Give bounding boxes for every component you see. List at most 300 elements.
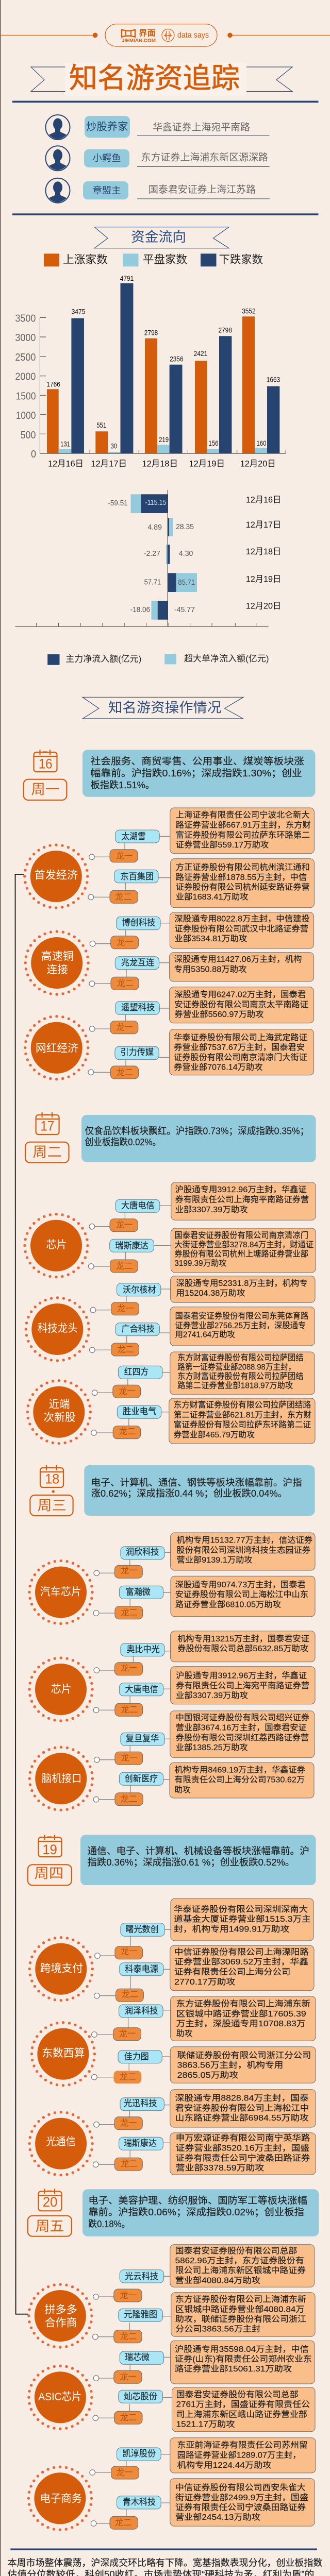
stock chain: 凯淳股份: 机构专用1224.44万助攻 xyxy=(177,2461,272,2470)
stock chain: 瑞斯康达 (Thursday): 营业部3378.59万助攻 xyxy=(176,2163,264,2173)
stock chain: 光云科技: 5862.96万主封，东方证券股份有 xyxy=(175,2256,304,2265)
stock chain: 光云科技: 光云科技 xyxy=(125,2272,158,2281)
stock chain: 瑞斯康达: 大街证券营业部3278.84万主封，财通证 xyxy=(174,1240,314,1249)
stock chain: 太湖雪: 龙一 xyxy=(116,851,133,861)
theme: 跨境支付 xyxy=(29,1938,92,2001)
stock chain: 瑞斯康达 xyxy=(88,1228,316,1273)
theme: 高速铜连接 xyxy=(25,931,88,994)
stock chain: 灿芯股份: 1521.17万助攻 xyxy=(176,2419,235,2429)
stock chain: 复旦复华: 复旦复华 xyxy=(126,1734,159,1743)
legend: market breadth xyxy=(44,253,263,266)
stock chain: 复旦复华: 业部1385.25万助攻 xyxy=(176,1743,248,1752)
stock chain: 润泽科技: 润泽科技 xyxy=(125,2006,158,2015)
stock chain: 太湖雪 xyxy=(89,808,314,862)
bar chart: market breadth: 3500 xyxy=(15,313,36,324)
day panel: Wednesday 18: 涨0.62%；深成指涨0.44 %；创业板跌0.04%。 xyxy=(91,1488,287,1499)
stock chain: 广合科技: 龙二 xyxy=(117,1345,134,1354)
stock chain: 凯淳股份 xyxy=(90,2438,316,2479)
stock chain: 大唐电信 (Wednesday): 券有限责任公司上海宛平南路证券营 xyxy=(176,1681,309,1690)
theme: 汽车芯片: 汽车芯片 xyxy=(40,1586,81,1598)
stock chain: 瑞斯康达 (Thursday): 瑞斯康达 xyxy=(124,2138,157,2148)
stock chain: 遥望科技: 遥望科技 xyxy=(121,1003,155,1012)
stock chain: 曙光数创 xyxy=(95,1899,314,1959)
stock chain: 曙光数创: 曙光数创 xyxy=(125,1925,159,1934)
theme: 科技龙头 xyxy=(26,1298,89,1361)
stock chain: 富瀚微: 安证券股份有限公司上海松江中山东 xyxy=(175,1590,308,1599)
header logo strip: JIEMIAN.COM xyxy=(122,39,156,43)
theme: 芯片: 芯片 xyxy=(46,1239,67,1251)
stock chain: 富瀚微: 龙二 xyxy=(121,1607,138,1618)
stock chain: 大唐电信: 沪股通专用3912.96万主封，华鑫证 xyxy=(175,1184,307,1194)
stock chain: 科泰电源: 2770.17万助攻 xyxy=(174,1977,235,1987)
stock chain: 遥望科技: 安证券股份有限公司南京太平南路证 xyxy=(174,1000,308,1009)
stock chain: 广合科技 xyxy=(90,1307,315,1356)
stock chain: 凯淳股份: 东亚前海证券有限责任公司苏州留 xyxy=(177,2441,308,2450)
stock chain: 太湖雪: 上海证券有限责任公司宁波北仑新大 xyxy=(176,810,310,820)
bar chart: market breadth: 12月19日 xyxy=(189,459,225,469)
bar chart: market breadth: 1663 xyxy=(267,376,280,384)
theme: 东数西算: 东数西算 xyxy=(42,2047,85,2059)
stock chain: 光迅科技 xyxy=(94,2090,316,2130)
legend: capital net inflow: 超大单净流入额(亿元) xyxy=(184,654,269,664)
stock chain: 奥比中光: 机构专用13215万主封，国泰君安证 xyxy=(177,1634,309,1643)
stock chain: 润泽科技: 区银城中路证券营业部17605.39 xyxy=(176,2009,306,2019)
stock chain: 胜业电气: 东方财富证券股份有限公司拉萨团结路 xyxy=(174,1400,311,1410)
stock chain: 太湖雪: 富证券股份有限公司拉萨东环路第二 xyxy=(176,831,310,840)
person: 小鳄鱼: 东方证券上海浦东新区源深路 xyxy=(141,151,268,163)
stock chain: 曙光数创: 龙一 xyxy=(121,1946,138,1956)
section heading: 知名游资操作情况 xyxy=(82,697,243,719)
stock chain: 创新医疗: 机构专用8469.19万主封，华鑫证券 xyxy=(174,1765,305,1774)
bar chart: capital net inflow: -59.51 xyxy=(108,499,128,507)
header logo strip: 界面 xyxy=(139,29,156,38)
theme: 高速铜连接: 高速铜 xyxy=(41,951,74,962)
theme: 高速铜连接: 连接 xyxy=(47,964,68,976)
stock chain: 红四方: 龙一 xyxy=(119,1386,136,1396)
day panel: Monday 16: 16 xyxy=(39,756,53,771)
theme: ASIC芯片: ASIC芯片 xyxy=(38,2391,81,2403)
stock chain: 复旦复华: 龙一 xyxy=(121,1753,138,1763)
bar chart: capital net inflow: 12月17日 xyxy=(246,520,281,530)
stock chain: 凯淳股份: 凯淳股份 xyxy=(123,2449,156,2459)
stock chain: 科泰电源: 证券有限责任公司上海分公司 xyxy=(174,1967,290,1976)
stock chain: 大唐电信 xyxy=(89,1182,316,1232)
stock chain: 富瀚微: 深股通专用9074.73万主封，国泰君 xyxy=(175,1580,306,1589)
day panel: Friday 20: 跌0.18%。 xyxy=(88,2218,130,2229)
stock chain: 大唐电信 (Wednesday): 沪股通专用3912.96万主封，华鑫证 xyxy=(176,1670,307,1681)
stock chain: 青木科技: 街证券营业部2499.9万主封，国盛 xyxy=(175,2493,308,2502)
bar chart: capital net inflow: -45.77 xyxy=(174,605,195,614)
stock chain: 胜业电气: 第二证券营业部621.81万主封，东方财 xyxy=(174,1411,311,1420)
bar chart: market breadth: 2500 xyxy=(15,352,36,363)
stock chain: 瑞斯康达 (Thursday) xyxy=(93,2133,316,2175)
day panel: Monday 16 xyxy=(24,750,315,800)
stock chain: 富瀚微 xyxy=(93,1576,315,1619)
stock chain: 遥望科技 xyxy=(90,987,314,1034)
day panel: Friday 20: 20 xyxy=(43,2194,58,2210)
stock chain: 大唐电信: 大唐电信 xyxy=(121,1200,155,1211)
stock chain: 瑞斯康达: 瑞斯康达 xyxy=(115,1241,148,1251)
stock chain: 博创科技 xyxy=(90,912,314,949)
bar chart: market breadth: 30 xyxy=(110,442,117,450)
person: 章盟主 xyxy=(45,178,270,203)
stock chain: 瑞芯微: 龙一 xyxy=(120,2372,137,2382)
section heading: 知名游资操作情况: 知名游资操作情况 xyxy=(108,700,221,715)
bar chart: market breadth: 1500 xyxy=(16,391,36,402)
person: 炒股养家 xyxy=(45,115,269,140)
stock chain: 广合科技: 用2741.64万助攻 xyxy=(175,1330,235,1340)
bar chart: market breadth: 2798 xyxy=(144,328,158,336)
theme: ASIC芯片 xyxy=(29,2366,92,2429)
day panel: Friday 20: 靠前。沪指跌0.06%；深成指跌0.02%；创业板指 xyxy=(88,2207,304,2217)
stock chain: 东百集团: 龙二 xyxy=(115,892,132,902)
bar chart: capital net inflow: 57.71 xyxy=(144,578,161,586)
theme: 光通信 xyxy=(29,2112,92,2175)
stock chain: 青木科技: 中信证券股份有限公司西安朱雀大 xyxy=(175,2483,306,2493)
stock chain: 青木科技: 证券有限责任公司宁波桑田路证券 xyxy=(175,2503,306,2512)
stock chain: 红四方: 东方财富证券股份有限公司拉萨团结 xyxy=(177,1371,304,1381)
header logo strip: data says xyxy=(177,31,209,40)
section heading: 资金流向: 资金流向 xyxy=(131,229,186,245)
stock chain: 瑞斯康达: 3199.39万助攻 xyxy=(174,1259,227,1268)
stock chain: 红四方: 路第二证券营业部1818.97万助攻 xyxy=(177,1381,293,1390)
stock chain: 大唐电信: 龙一 xyxy=(116,1220,133,1230)
stock chain: 佳力图: 佳力图 xyxy=(124,2052,149,2062)
stock chain: 胜业电气: 胜业电气 xyxy=(123,1406,156,1416)
stock chain: 广合科技: 广合科技 xyxy=(122,1324,155,1334)
day panel: Monday 16: 幅靠前。沪指跌0.16%；深成指跌1.30%；创业 xyxy=(91,768,302,778)
day panel: Friday 20: 周五 xyxy=(36,2219,64,2234)
day panel: Tuesday 17: 仅食品饮料板块飘红。沪指跌0.73%；深成指跌0.35%； xyxy=(85,1125,309,1137)
stock chain: 曙光数创: 华泰证券股份有限公司深圳深南大 xyxy=(174,1905,308,1914)
bar chart: capital net inflow: 4.30 xyxy=(179,549,193,558)
legend: capital net inflow: 主力净流入额(亿元) xyxy=(65,654,141,664)
theme: 近端次新股: 近端 xyxy=(49,1398,70,1411)
stock chain: 兆龙互连: 龙二 xyxy=(117,978,134,988)
theme: 首发经济 xyxy=(25,845,88,908)
stock chain: 曙光数创: 道基金大厦证券营业部1515.3万主 xyxy=(174,1914,311,1924)
bar chart: market breadth: 131 xyxy=(60,439,70,448)
day panel: Friday 20: 电子、美容护理、纺织服饰、国防军工等板块涨幅 xyxy=(88,2195,307,2206)
bar chart: capital net inflow: 4.89 xyxy=(147,523,162,532)
day panel: Monday 16: 板指跌1.51%。 xyxy=(91,779,155,790)
day panel: Wednesday 18: 周三 xyxy=(38,1498,67,1514)
bar chart: capital net inflow: -2.27 xyxy=(144,549,160,558)
stock chain: 引力传媒: 华泰证券股份有限公司上海武定路证 xyxy=(174,1033,307,1042)
stock chain: 瑞斯康达 (Thursday): 申万宏源证券有限公司南宁英华路 xyxy=(176,2133,310,2143)
stock chain: 科泰电源: 龙二 xyxy=(122,1990,138,1999)
stock chain: 大唐电信 (Wednesday): 龙二 xyxy=(121,1705,138,1715)
stock chain: 佳力图: 3863.56万主封，机构专用 xyxy=(177,2061,283,2070)
stock chain: 遥望科技: 券营业部5560.97万助攻 xyxy=(174,1010,263,1019)
stock chain: 灿芯股份: 2761万主封，国盛证券有限责任公 xyxy=(176,2400,310,2409)
stock chain: 广合科技: 国泰君安证券股份有限公司东莞体育路 xyxy=(175,1312,308,1321)
stock chain: 科泰电源 xyxy=(94,1945,314,2002)
stock chain: 引力传媒: 券营业部7076.14万助攻 xyxy=(174,1062,262,1072)
stock chain: 大唐电信 (Wednesday) xyxy=(93,1667,315,1716)
bar chart: market breadth: 0 xyxy=(31,449,36,460)
day panel: Thursday 19: 周四 xyxy=(34,1866,63,1882)
stock chain: 红四方: 红四方 xyxy=(124,1367,148,1377)
bar chart: market breadth: 3475 xyxy=(72,307,85,315)
stock chain: 光云科技: 龙一 xyxy=(120,2291,137,2300)
stock chain: 创新医疗: 龙二 xyxy=(121,1794,137,1804)
person: 炒股养家: 炒股养家 xyxy=(86,121,128,133)
stock chain: 科泰电源: 科泰电源 xyxy=(125,1964,158,1974)
stock chain: 瑞斯康达: 国泰君安证券股份有限公司南京清凉门 xyxy=(174,1231,308,1240)
bar chart: market breadth: 219 xyxy=(159,435,169,444)
stock chain: 润泽科技: 东方证券股份有限公司上海浦东新 xyxy=(176,1999,310,2008)
stock chain: 创新医疗: 助攻 xyxy=(174,1785,190,1794)
stock chain: 青木科技 xyxy=(91,2479,315,2529)
stock chain: 东百集团: 证券股份有限公司杭州延安路证券营 xyxy=(176,883,310,892)
stock chain: 大唐电信 (Wednesday): 大唐电信 xyxy=(125,1684,158,1694)
day panel: Thursday 19 xyxy=(28,1835,316,1885)
rule above summary xyxy=(10,2548,317,2550)
bar chart: market breadth: 12月20日 xyxy=(240,459,276,469)
stock chain: 引力传媒 xyxy=(88,1029,314,1079)
theme: 拼多多合作商 xyxy=(29,2284,92,2347)
person: 章盟主: 章盟主 xyxy=(93,185,121,196)
bar chart: capital net inflow: 85.71 xyxy=(178,578,195,587)
stock chain: 东百集团: 路证券营业部1878.55万主封，中信 xyxy=(176,873,307,882)
person: 小鳄鱼: 小鳄鱼 xyxy=(93,152,121,163)
theme: 脑机接口 xyxy=(29,1747,92,1810)
stock chain: 光云科技: 营业部4080.84万助攻 xyxy=(175,2276,260,2285)
bar chart: market breadth: 12月18日 xyxy=(142,459,178,469)
bar chart: market breadth: 12月17日 xyxy=(91,459,127,469)
stock chain: 富瀚微: 路证券营业部6810.05万助攻 xyxy=(175,1600,281,1609)
timeline line xyxy=(15,874,28,2314)
stock chain: 大唐电信 (Wednesday): 业部3307.39万助攻 xyxy=(176,1691,248,1700)
stock chain: 奥比中光 xyxy=(94,1631,315,1675)
bar chart: capital net inflow: 28.35 xyxy=(176,522,194,531)
summary paragraph xyxy=(8,2557,322,2576)
stock chain: 瑞斯康达: 券股份有限公司杭州上塘路证券营业部 xyxy=(174,1249,308,1259)
stock chain: 沃尔核材 xyxy=(90,1276,315,1315)
stock chain: 灿芯股份: 灿芯股份 xyxy=(124,2392,157,2401)
stock chain: 润欣科技: 营业部9139.1万助攻 xyxy=(176,1555,253,1565)
stock chain: 胜业电气: 龙二 xyxy=(119,1427,136,1436)
stock chain: 创新医疗 xyxy=(93,1762,314,1806)
day panel: Thursday 19: 指跌0.36%；深成指涨0.61 %；创业板跌0.52%。 xyxy=(87,1857,294,1868)
stock chain: 光迅科技: 龙一 xyxy=(120,2119,137,2128)
header logo strip xyxy=(0,24,330,46)
day panel: Monday 16: 社会服务、商贸零售、公用事业、煤炭等板块涨 xyxy=(91,756,304,767)
stock chain: 红四方: 路第一证券营业部2088.98万主封， xyxy=(177,1362,296,1371)
legend: capital net inflow xyxy=(47,654,269,665)
stock chain: 东百集团: 方正证券股份有限公司杭州滨江通和 xyxy=(176,862,310,872)
stock chain: 兆龙互连 xyxy=(89,953,314,990)
stock chain: 东百集团 xyxy=(88,859,314,908)
stock chain: 佳力图: 2865.05万助攻 xyxy=(177,2071,238,2080)
rule top xyxy=(12,101,319,103)
stock chain: 瑞斯康达 (Thursday): 龙二 xyxy=(121,2159,138,2169)
stock chain: 创新医疗: 创新医疗 xyxy=(125,1774,158,1784)
stock chain: 博创科技: 业部3534.81万助攻 xyxy=(174,934,247,943)
person: 章盟主: 国泰君安证券上海江苏路 xyxy=(148,184,256,195)
bar chart: market breadth: 2000 xyxy=(15,371,36,383)
stock chain: 凯淳股份: 园路证券营业部1289.07万主封， xyxy=(177,2450,301,2460)
bar chart: market breadth xyxy=(15,274,286,469)
stock chain: 太湖雪: 证券营业部559.17万助攻 xyxy=(176,840,269,850)
stock chain: 润欣科技: 润欣科技 xyxy=(126,1547,159,1557)
title ribbon: 知名游资追踪 xyxy=(69,62,240,94)
theme: 脑机接口: 脑机接口 xyxy=(42,1773,81,1785)
stock chain: 博创科技: 龙一 xyxy=(117,938,134,947)
stock chain: 瑞斯康达 (Thursday): 证券有限责任公司宁波桑田路证券 xyxy=(176,2154,310,2163)
stock chain: 引力传媒: 券营业部7537.67万主封，国泰君安 xyxy=(174,1043,305,1052)
legend: market breadth: 下跌家数 xyxy=(219,253,263,266)
stock chain: 润泽科技: 万主封，深股通专用10708.83万 xyxy=(176,2019,306,2028)
bar chart: market breadth: 3000 xyxy=(15,332,36,344)
stock chain: 引力传媒: 龙二 xyxy=(117,1067,133,1077)
stock chain: 瑞斯康达 (Thursday): 证券营业部3520.16万主封，国盛 xyxy=(176,2143,309,2153)
stock chain: 光迅科技: 深股通专用8828.84万主封，国泰 xyxy=(175,2094,309,2103)
stock chain: 沃尔核材: 用15204.38万助攻 xyxy=(176,1289,245,1298)
stock chain: 红四方 xyxy=(92,1352,315,1398)
stock chain: 青木科技: 营业部2454.13万助攻 xyxy=(175,2513,260,2522)
bar chart: capital net inflow: 12月18日 xyxy=(246,547,281,556)
stock chain: 复旦复华: 中国银河证券股份有限公司绍兴证券 xyxy=(176,1713,309,1722)
bar chart: market breadth: 551 xyxy=(96,421,106,429)
bar chart: market breadth: 3552 xyxy=(242,307,256,315)
stock chain: 大唐电信: 业部3307.39万助攻 xyxy=(175,1205,248,1214)
summary paragraph: 本周市场整体震荡，沪深成交环比略有下降。宽基指数表现分化，创业板指数 xyxy=(8,2557,322,2568)
stock chain: 润泽科技 xyxy=(92,1996,316,2041)
stock chain: 青木科技: 龙二 xyxy=(114,2518,131,2528)
day panel: Thursday 19: 通信、电子、计算机、机械设备等板块涨幅靠前。沪 xyxy=(87,1845,309,1856)
stock chain: 佳力图: 龙二 xyxy=(120,2072,136,2081)
stock chain: 元隆雅图: 东方证券股份有限公司上海浦东新 xyxy=(175,2295,306,2304)
stock chain: 太湖雪: 路证券营业部667.91万主封，东方财 xyxy=(176,820,311,829)
day panel: Friday 20 xyxy=(28,2189,319,2236)
theme: 芯片 (Wednesday): 芯片 xyxy=(51,1684,72,1695)
stock chain: 元隆雅图: 元隆雅图 xyxy=(124,2310,157,2319)
theme: 网红经济 xyxy=(25,1016,88,1079)
stock chain: 瑞芯微: 路证券营业部15061.31万助攻 xyxy=(175,2364,292,2374)
bar chart: market breadth: 1766 xyxy=(46,380,60,388)
stock chain: 元隆雅图: 区银城中路证券营业部4080.84万 xyxy=(175,2305,305,2314)
theme: 拼多多合作商: 拼多多 xyxy=(44,2304,77,2316)
bar chart: capital net inflow: 12月20日 xyxy=(246,601,281,611)
stock chain: 红四方: 东方财富证券股份有限公司拉萨团结 xyxy=(177,1353,304,1362)
stock chain: 润泽科技: 助攻 xyxy=(176,2029,192,2038)
stock chain: 广合科技: 证券营业部2756.25万主封，深股通专 xyxy=(175,1321,306,1330)
stock chain: 凯淳股份: 龙一 xyxy=(116,2468,133,2477)
day panel: Tuesday 17: 周二 xyxy=(32,1145,62,1160)
day panel: Tuesday 17: 创业板指跌0.02%。 xyxy=(85,1137,161,1147)
stock chain: 博创科技: 证券股份有限公司武汉中北路证券营 xyxy=(174,924,308,934)
stock chain: 润泽科技: 龙一 xyxy=(119,2029,136,2039)
stock chain: 沃尔核材: 沃尔核材 xyxy=(123,1285,156,1295)
day panel: Wednesday 18 xyxy=(30,1465,315,1516)
stock chain: 创新医疗: 有限责任公司上海分公司7530.62万 xyxy=(174,1775,305,1785)
bar chart: capital net inflow xyxy=(15,490,281,626)
bar chart: capital net inflow: 12月16日 xyxy=(246,495,281,505)
stock chain: 佳力图: 联储证券股份有限公司浙江分公司 xyxy=(177,2050,311,2060)
bar chart: capital net inflow: -18.06 xyxy=(130,605,150,614)
stock chain: 灿芯股份: 龙二 xyxy=(120,2413,137,2422)
stock chain: 元隆雅图 xyxy=(93,2293,315,2343)
stock chain: 灿芯股份 xyxy=(93,2387,315,2432)
rule second xyxy=(12,213,319,215)
theme: 近端次新股 xyxy=(27,1381,90,1444)
theme: 科技龙头: 科技龙头 xyxy=(38,1323,78,1334)
stock chain: 兆龙互连: 专用5350.88万助攻 xyxy=(174,964,246,974)
stock chain: 润欣科技: 股份有限公司深圳湾科技生态园证券 xyxy=(176,1546,310,1555)
theme: 跨境支付: 跨境支付 xyxy=(40,1963,83,1974)
stock chain: 元隆雅图: 分公司3863.56万主封 xyxy=(175,2325,260,2334)
stock chain: 沃尔核材: 龙一 xyxy=(117,1303,134,1314)
stock chain: 兆龙互连: 兆龙互连 xyxy=(121,958,154,968)
person: 小鳄鱼 xyxy=(45,146,269,171)
bar chart: market breadth: 12月16日 xyxy=(48,459,84,469)
stock chain: 沃尔核材: 深股通专用52331.8万主封，机构专 xyxy=(176,1279,308,1288)
bar chart: market breadth: 2421 xyxy=(194,349,207,358)
section heading: 资金流向 xyxy=(94,227,229,248)
stock chain: 富瀚微: 富瀚微 xyxy=(126,1587,151,1597)
stock chain: 科泰电源: 中信证券股份有限公司上海溧阳路 xyxy=(174,1947,309,1957)
stock chain: 科泰电源: 证券营业部3069.52万主封，华鑫 xyxy=(174,1957,308,1967)
theme: 首发经济: 首发经济 xyxy=(34,870,78,881)
stock chain: 光云科技: 国泰君安证券股份有限公司总部 xyxy=(175,2246,297,2256)
bar chart: capital net inflow: 12月19日 xyxy=(246,574,281,584)
day panel: Monday 16: 周一 xyxy=(31,782,59,798)
stock chain: 复旦复华: 券股份有限公司深圳红荔西路证券营 xyxy=(176,1733,309,1742)
bar chart: market breadth: 2356 xyxy=(170,354,184,363)
stock chain: 青木科技: 青木科技 xyxy=(123,2497,156,2507)
stock chain: 元隆雅图: 龙二 xyxy=(120,2332,137,2341)
stock chain: 光云科技: 限公司上海浦东新区银城中路证券 xyxy=(175,2266,306,2275)
title ribbon xyxy=(31,62,292,96)
bar chart: market breadth: 2798 xyxy=(218,326,232,334)
stock chain: 胜业电气: 富证券股份有限公司拉萨东环路第二证 xyxy=(174,1420,311,1429)
day panel: Wednesday 18: 电子、计算机、通信、钢铁等板块涨幅靠前。沪指 xyxy=(91,1477,302,1488)
stock chain: 遥望科技: 龙一 xyxy=(116,1022,133,1032)
stock chain: 胜业电气 xyxy=(91,1398,315,1444)
stock chain: 太湖雪: 太湖雪 xyxy=(122,832,146,841)
bar chart: market breadth: 1000 xyxy=(16,410,36,421)
bar chart: capital net inflow: -115.15 xyxy=(145,498,166,507)
stock chain: 复旦复华 xyxy=(94,1711,315,1765)
day panel: Tuesday 17: 17 xyxy=(40,1118,54,1134)
stock chain: 光迅科技: 山东路证券营业部6984.55万助攻 xyxy=(175,2113,309,2123)
stock chain: 大唐电信: 券有限责任公司上海宛平南路证券营 xyxy=(175,1195,309,1205)
bar chart: market breadth: 160 xyxy=(257,439,267,447)
day panel: Wednesday 18: 18 xyxy=(45,1471,59,1487)
stock chain: 润欣科技: 龙一 xyxy=(121,1566,138,1575)
stock chain: 润欣科技 xyxy=(94,1533,315,1578)
stock chain: 博创科技: 深股通专用8022.8万主封，中信建投 xyxy=(174,914,310,923)
stock chain: 兆龙互连: 深股通专用11427.06万主封，机构 xyxy=(174,955,302,964)
stock chain: 博创科技: 博创科技 xyxy=(122,918,155,927)
theme: 光通信: 光通信 xyxy=(46,2136,76,2148)
stock chain: 灿芯股份: 国泰君安证券股份有限公司总部 xyxy=(176,2390,299,2399)
stock chain: 奥比中光: 奥比中光 xyxy=(126,1645,160,1654)
stock chain: 佳力图 xyxy=(92,2047,316,2083)
stock chain: 复旦复华: 营业部3674.16万主封，国泰君安证 xyxy=(176,1723,307,1732)
stock chain: 元隆雅图: 助攻，联储证券股份有限公司浙江 xyxy=(175,2314,306,2324)
day panel: Tuesday 17 xyxy=(25,1112,316,1163)
stock chain: 遥望科技: 深股通专用6247.02万主封，国泰君 xyxy=(174,990,306,999)
bar chart: market breadth: 500 xyxy=(21,430,36,441)
theme: 网红经济: 网红经济 xyxy=(36,1043,78,1054)
theme: 汽车芯片 xyxy=(29,1561,92,1624)
legend: market breadth: 平盘家数 xyxy=(143,253,187,266)
person: 炒股养家: 华鑫证券上海宛平南路 xyxy=(153,122,250,133)
stock chain: 瑞斯康达: 龙二 xyxy=(116,1261,133,1271)
